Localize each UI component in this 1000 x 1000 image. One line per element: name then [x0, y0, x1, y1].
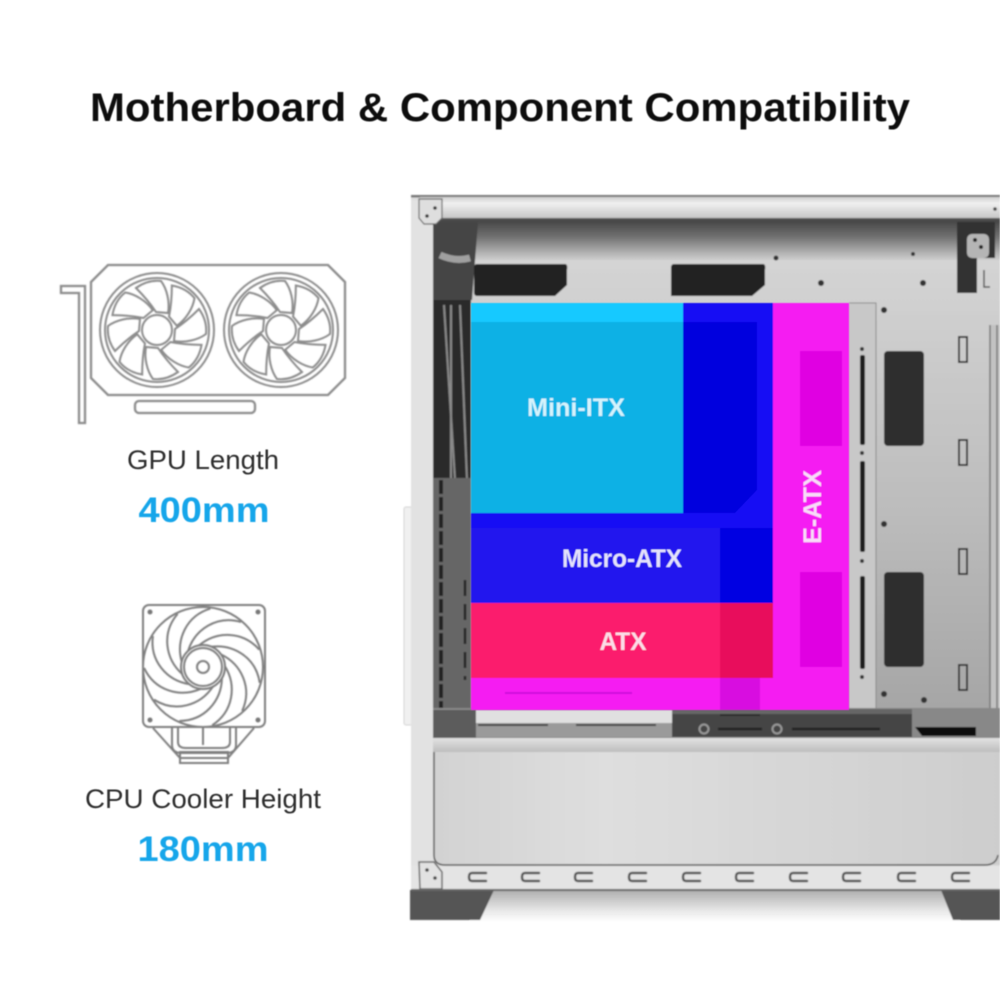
top-left corner plate [419, 199, 442, 224]
label: CPU cooler height: CPU Cooler Height [85, 784, 322, 814]
E-ATX area [471, 303, 849, 710]
motherboard size overlay [471, 303, 849, 710]
value: CPU cooler height: 180mm [138, 830, 268, 869]
right cable tray details [774, 222, 1000, 740]
label: E-ATX: E-ATX [799, 470, 827, 544]
icon: CPU cooler [143, 605, 265, 763]
bottom bar with vents [411, 862, 1000, 891]
PC case photo [404, 195, 1000, 922]
value: GPU length: 400mm [138, 491, 270, 530]
label: ATX: ATX [600, 628, 647, 656]
exhaust vents [474, 264, 765, 296]
label: GPU length: GPU Length [127, 445, 279, 475]
ATX area [471, 603, 773, 678]
back panel [433, 220, 1000, 740]
case feet and floor shadow [410, 890, 1000, 922]
Micro-ATX area [471, 303, 773, 603]
Mini-ITX area [471, 303, 683, 513]
case frame [404, 195, 1000, 890]
label: Mini-ITX: Mini-ITX [527, 394, 625, 422]
label: Micro-ATX: Micro-ATX [562, 545, 682, 573]
title: Motherboard & Component Compatibility [90, 86, 911, 130]
lower tray and shroud [433, 708, 1000, 865]
icon: graphics card [61, 265, 345, 423]
